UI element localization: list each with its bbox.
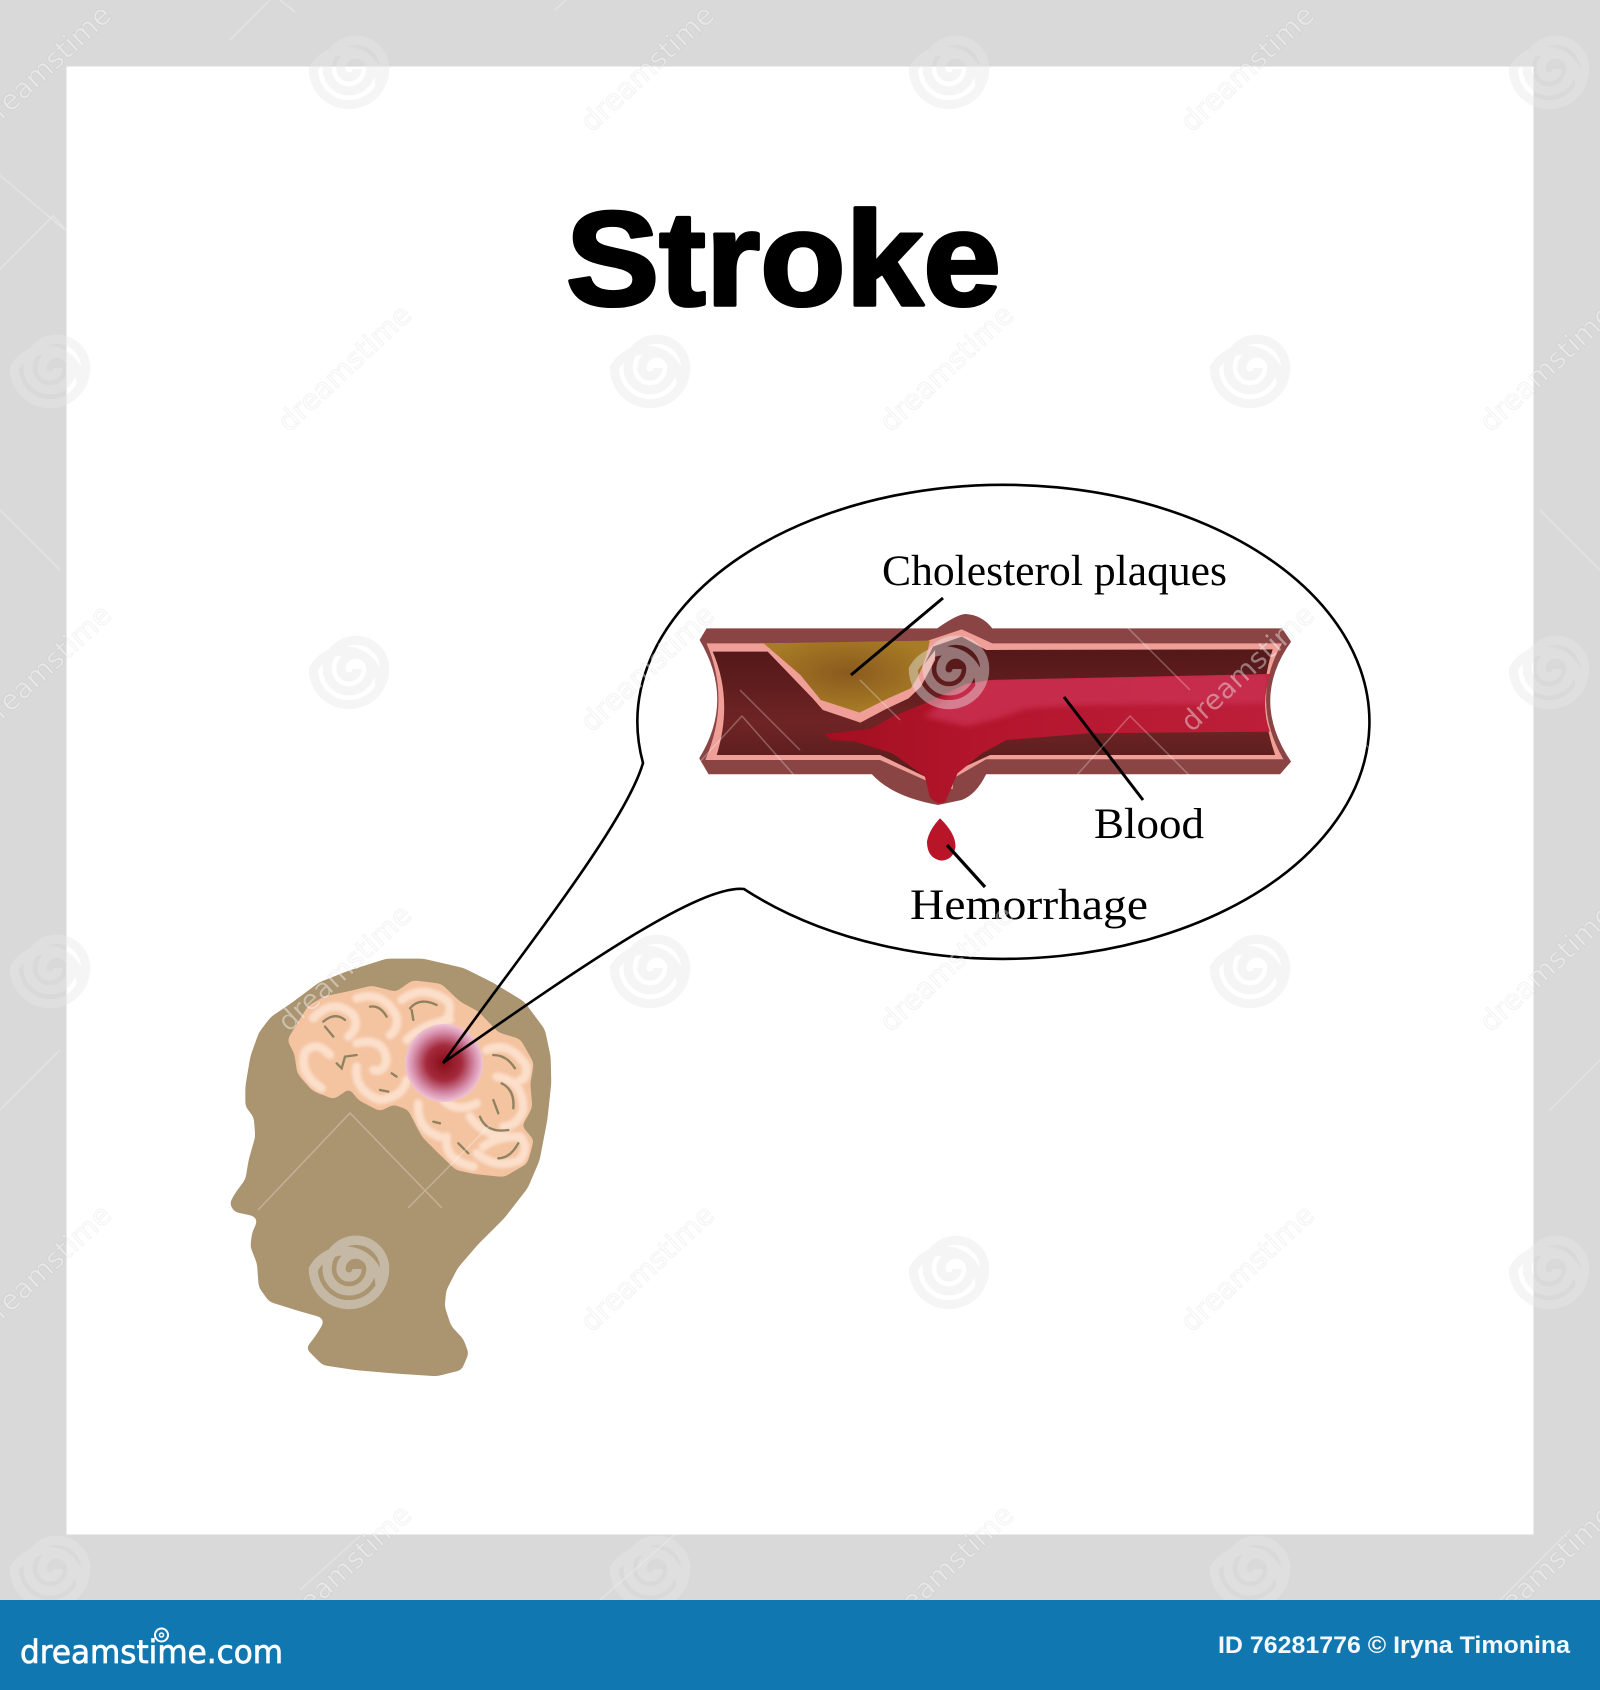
watermark pattern: dreamstime [873, 298, 1020, 438]
plaque lining [760, 643, 935, 723]
title: Stroke [566, 185, 1001, 334]
watermark pattern: dreamstime [873, 898, 1020, 1038]
blood drop [927, 818, 956, 861]
footer bar [0, 1600, 1600, 1690]
watermark pattern: dreamstime [1174, 598, 1321, 738]
vessel lumen [713, 637, 1275, 780]
watermark pattern: dreamstime [271, 298, 418, 438]
callout bubble [443, 485, 1369, 1063]
footer credit: ID 76281776 © Iryna Timonina [1218, 1632, 1571, 1659]
watermark pattern: dreamstime [1174, 0, 1321, 138]
watermark pattern: dreamstime [574, 598, 721, 738]
blood highlight [925, 672, 1271, 727]
label: cholesterol plaques: Cholesterol plaques [882, 547, 1227, 595]
stroke lesion [405, 1024, 483, 1102]
label: blood: Blood [1094, 800, 1204, 848]
watermark pattern: dreamstime [873, 1498, 1020, 1638]
cholesterol plaque [764, 641, 930, 713]
head silhouette [231, 960, 550, 1375]
footer bar cover [0, 1600, 1600, 1690]
head with brain [231, 960, 550, 1375]
artery cross-section [699, 614, 1291, 861]
watermark pattern: dreamstime [1174, 1198, 1321, 1338]
label: hemorrhage: Hemorrhage [910, 881, 1148, 929]
blood flow [825, 674, 1271, 803]
artery inner lining [705, 629, 1283, 789]
artery outer wall [699, 614, 1291, 805]
pointer: cholesterol [851, 598, 943, 675]
pointer: blood [1064, 697, 1143, 800]
footer logo: dreamstime.com [20, 1633, 283, 1671]
brain [291, 983, 531, 1174]
watermark pattern: dreamstime [574, 0, 721, 138]
white panel [66, 66, 1534, 1534]
watermark pattern: dreamstime [271, 898, 418, 1038]
watermark pattern: dreamstime [574, 1198, 721, 1338]
pointer: hemorrhage [947, 845, 985, 887]
watermark pattern: dreamstime [271, 1498, 418, 1638]
